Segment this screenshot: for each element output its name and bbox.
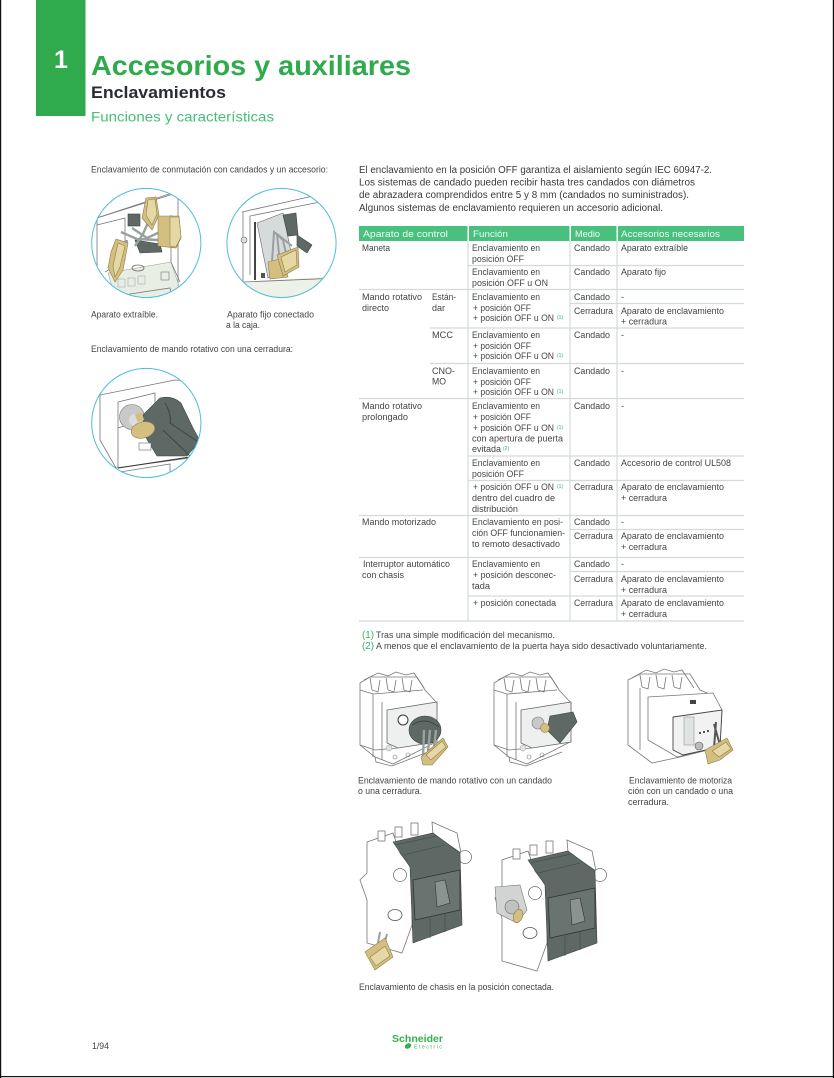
row: Mando rotativo directo: Candado: [574, 366, 610, 376]
row: Maneta: Enclavamiento en: [472, 243, 540, 253]
row: Mando motorizado: Candado: [574, 517, 610, 527]
caption: rotary handle with padlock or lock: o una cerradura.: [358, 786, 422, 796]
intro paragraph: Algunos sistemas de enclavamiento requieren un accesorio adicional.: [359, 203, 663, 214]
row: Interruptor automático con chasis: con chasis: [362, 570, 404, 580]
row: Mando rotativo directo: dar: [432, 303, 445, 313]
row: Mando rotativo prolongado: Aparato de enclavamiento: [621, 482, 724, 492]
footnotes: Tras una simple modificación del mecanismo.: [376, 630, 555, 640]
intro paragraph: El enclavamiento en la posición OFF garantiza el aislamiento según IEC 60947-2.: [359, 165, 712, 176]
row: Mando rotativo prolongado: + posición OFF u ON: [473, 482, 554, 492]
row: Maneta: Maneta: [362, 243, 390, 253]
illustration: breaker with rotary handle and key lock: [494, 672, 577, 766]
caption: withdrawable device: Aparato extraíble.: [91, 310, 158, 320]
row: Mando motorizado: ción OFF funcionamien-: [472, 528, 565, 538]
row: Mando motorizado: to remoto desactivado: [472, 539, 560, 549]
section tab with chapter number: [36, 0, 86, 116]
caption: rotary handle with padlock or lock: [358, 776, 552, 796]
row: Interruptor automático con chasis: [362, 559, 724, 619]
row: Mando motorizado: Aparato de enclavamiento: [621, 531, 724, 541]
row: Mando rotativo prolongado: -: [621, 401, 624, 411]
row: Mando rotativo directo: CNO-: [432, 366, 455, 376]
caption: fixed device: [226, 310, 314, 330]
row: Interruptor automático con chasis: + posición conectada: [473, 598, 556, 608]
row: Mando motorizado: Mando motorizado: [362, 517, 436, 527]
title block: [91, 50, 411, 124]
intro paragraph: [359, 165, 712, 214]
row: Interruptor automático con chasis: Candado: [574, 559, 610, 569]
section tab with chapter number: 1: [54, 46, 68, 74]
row: Mando rotativo prolongado: (1): [557, 484, 563, 490]
row: Mando rotativo directo: [362, 292, 724, 397]
row: Mando rotativo directo: Enclavamiento en: [472, 330, 540, 340]
row: Mando rotativo directo: + posición OFF u ON: [473, 313, 554, 323]
row: Mando rotativo prolongado: (1): [557, 425, 563, 431]
table header: Función: [473, 229, 508, 240]
table header: Aparato de control: [363, 229, 448, 240]
row: Mando rotativo prolongado: (2): [503, 446, 509, 452]
illustration: chassis with padlock: [360, 822, 472, 970]
row: Mando rotativo directo: + cerradura: [621, 316, 667, 326]
logo: Schneider Electric: Electric: [414, 1044, 442, 1050]
row: Mando rotativo prolongado: Mando rotativo: [362, 401, 422, 411]
row: Interruptor automático con chasis: Cerradura: [574, 574, 613, 584]
row: Mando rotativo directo: + posición OFF u ON: [473, 387, 554, 397]
caption: rotary handle with padlock or lock: Enclavamiento de mando rotativo con un candado: [358, 776, 552, 786]
row: Mando rotativo prolongado: con apertura de puerta: [472, 434, 563, 444]
title block: Funciones y características: [91, 108, 274, 124]
table header: [359, 226, 744, 241]
table: interlocking systems: [359, 226, 744, 621]
intro paragraph: de abrazadera comprendidos entre 5 y 8 mm (candados no suministrados).: [359, 190, 689, 201]
row: Mando rotativo prolongado: Accesorio de control UL508: [621, 458, 731, 468]
row: Mando rotativo prolongado: posición OFF: [472, 469, 524, 479]
row: Mando rotativo directo: MCC: [432, 330, 454, 340]
row: Mando rotativo directo: -: [621, 366, 624, 376]
row: Mando rotativo prolongado: Candado: [574, 401, 610, 411]
row: Maneta: posición OFF: [472, 254, 524, 264]
caption: fixed device: a la caja.: [226, 320, 260, 330]
row: Maneta: Aparato extraíble: [621, 243, 688, 253]
row: Mando rotativo directo: Cerradura: [574, 306, 613, 316]
row: Mando rotativo directo: Mando rotativo: [362, 292, 422, 302]
row: Mando rotativo directo: -: [621, 292, 624, 302]
row: Maneta: Enclavamiento en: [472, 267, 540, 277]
footnotes: [362, 630, 707, 652]
row: Mando rotativo prolongado: [362, 401, 731, 514]
intro paragraph: Los sistemas de candado pueden recibir hasta tres candados con diámetros: [359, 178, 695, 188]
row: Mando rotativo directo: -: [621, 330, 624, 340]
row: Maneta: Aparato fijo: [621, 267, 666, 277]
caption: motor mechanism: cerradura.: [628, 797, 669, 807]
logo: Schneider Electric: [392, 1033, 443, 1050]
row: Mando rotativo directo: + posición OFF: [473, 341, 531, 351]
row: Mando rotativo directo: Están-: [432, 292, 456, 302]
caption: motor mechanism: [628, 776, 733, 807]
footnotes: (2): [362, 641, 374, 652]
illustration: fixed device with padlocks: [226, 188, 340, 300]
row: Mando rotativo directo: MO: [432, 376, 446, 386]
illustration: breaker with rotary handle and padlock: [360, 672, 448, 766]
caption: motor mechanism: ción con un candado o una: [628, 786, 733, 796]
row: Interruptor automático con chasis: + cerradura: [621, 585, 667, 595]
footnotes: A menos que el enclavamiento de la puerta haya sido desactivado voluntariamente.: [376, 641, 707, 651]
row: Mando rotativo prolongado: evitada: [472, 444, 501, 454]
row: Maneta: posición OFF u ON: [472, 278, 548, 288]
row: Mando rotativo directo: Candado: [574, 330, 610, 340]
row: Interruptor automático con chasis: Cerradura: [574, 598, 613, 608]
row: Interruptor automático con chasis: + cerradura: [621, 609, 667, 619]
illustration: chassis with key lock: [495, 840, 606, 971]
row: Mando rotativo directo: + posición OFF: [473, 377, 531, 387]
footnotes: (1): [362, 630, 374, 641]
illustration: withdrawable device with padlocks: [92, 188, 201, 300]
row: Mando motorizado: Enclavamiento en posi-: [472, 517, 563, 527]
row: Maneta: [362, 243, 688, 288]
table header: Medio: [575, 229, 600, 240]
row: Mando rotativo prolongado: prolongado: [362, 412, 408, 422]
row: Mando rotativo prolongado: Cerradura: [574, 482, 613, 492]
row: Interruptor automático con chasis: tada: [472, 581, 490, 591]
row: Mando rotativo directo: + posición OFF u ON: [473, 351, 554, 361]
table header: Accesorios necesarios: [621, 229, 720, 240]
illustration: rotary handle with key lock: [92, 368, 205, 480]
row: Maneta: Candado: [574, 267, 610, 277]
row: Mando motorizado: + cerradura: [621, 542, 667, 552]
row: Maneta: Candado: [574, 243, 610, 253]
row: Mando rotativo prolongado: + posición OFF: [473, 412, 531, 422]
illustration: breaker with motor mechanism and padlock: [628, 669, 733, 764]
row: Mando rotativo prolongado: Enclavamiento en: [472, 401, 540, 411]
row: Mando rotativo prolongado: + cerradura: [621, 493, 667, 503]
row: Interruptor automático con chasis: Enclavamiento en: [472, 559, 540, 569]
caption: motor mechanism: Enclavamiento de motoriza: [629, 776, 732, 786]
row: Interruptor automático con chasis: Aparato de enclavamiento: [621, 598, 724, 608]
title block: Enclavamientos: [91, 83, 226, 102]
row: Interruptor automático con chasis: + posición desconec-: [473, 570, 556, 580]
row: Interruptor automático con chasis: -: [621, 559, 624, 569]
row: Mando rotativo directo: + posición OFF: [473, 303, 531, 313]
row: Mando rotativo prolongado: Candado: [574, 458, 610, 468]
row: Mando rotativo directo: (1): [557, 389, 563, 395]
row: Mando rotativo directo: Aparato de enclavamiento: [621, 306, 724, 316]
row: Mando motorizado: [362, 517, 724, 552]
row: Mando rotativo directo: (1): [557, 353, 563, 359]
caption: chassis in connected position: Enclavamiento de chasis en la posición conectada.: [359, 982, 554, 992]
caption: commutation interlock heading: Enclavamiento de conmutación con candados y un accesorio:: [91, 164, 328, 174]
row: Mando rotativo prolongado: + posición OFF u ON: [473, 423, 554, 433]
row: Mando rotativo directo: Enclavamiento en: [472, 366, 540, 376]
logo: Schneider Electric: Schneider: [392, 1033, 443, 1045]
caption: fixed device: Aparato fijo conectado: [227, 310, 314, 320]
row: Mando rotativo directo: directo: [362, 303, 389, 313]
row: Mando rotativo directo: Enclavamiento en: [472, 292, 540, 302]
row: Mando rotativo prolongado: distribución: [472, 504, 518, 514]
row: Mando rotativo prolongado: dentro del cuadro de: [472, 493, 555, 503]
row: Mando motorizado: Cerradura: [574, 531, 613, 541]
row: Mando motorizado: -: [621, 517, 624, 527]
caption: rotary handle interlock heading: Enclavamiento de mando rotativo con una cerradura:: [91, 344, 293, 354]
title block: Accesorios y auxiliares: [91, 50, 411, 81]
row: Mando rotativo directo: (1): [557, 315, 563, 321]
row: Mando rotativo directo: Candado: [574, 292, 610, 302]
row: Mando rotativo prolongado: Enclavamiento en: [472, 458, 540, 468]
page number: 1/94: [92, 1041, 109, 1051]
row: Interruptor automático con chasis: Aparato de enclavamiento: [621, 574, 724, 584]
row: Interruptor automático con chasis: Interruptor automático: [363, 559, 450, 569]
